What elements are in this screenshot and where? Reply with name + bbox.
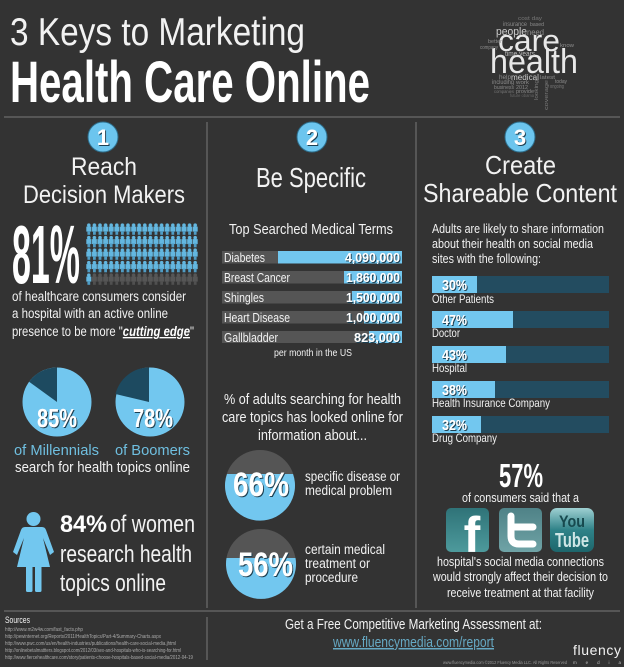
word cloud: coverage <box>544 80 550 110</box>
logo: fluency media: media <box>573 660 621 665</box>
word cloud: future obama <box>510 93 534 98</box>
bar chart: who adults share with: Health Insurance Company <box>432 396 550 410</box>
bar chart: who adults share with: Doctor <box>432 326 460 340</box>
text: cutting edge statement: of healthcare consumers consider <box>12 289 186 304</box>
word cloud: need <box>527 28 544 37</box>
icon: youtube: You <box>559 512 585 531</box>
word cloud: time years <box>505 51 535 58</box>
text: 84% of women: research health <box>60 541 192 568</box>
bar chart: who adults share with: Hospital <box>432 361 467 375</box>
logo: fluency media <box>573 642 621 665</box>
panel: create shareable content <box>423 122 618 600</box>
footer: sources: http://pewinternet.org/Reports/2011/HealthTopics/Part-4/Summary-Charts.aspx <box>5 634 161 640</box>
heading: reach decision makers: Decision Makers <box>23 181 185 209</box>
panel: reach decision makers <box>12 122 198 597</box>
bar chart: who adults share with <box>432 276 609 445</box>
icon: number 3 badge: 3 <box>514 125 526 150</box>
bar chart: top searched medical terms: Breast Cancer <box>224 271 290 285</box>
title: Health Care Online <box>10 50 370 115</box>
text: social media connections: receive treatment at that facility <box>447 585 594 600</box>
heading: reach decision makers: Reach <box>71 153 137 181</box>
word cloud: provide <box>516 89 534 95</box>
icon: number 1 badge <box>88 122 118 152</box>
pictogram: 81 of 100 people <box>86 223 198 286</box>
gauge: 66% specific disease <box>225 450 400 521</box>
icon: facebook <box>446 507 489 563</box>
heading: be specific: Be Specific <box>256 162 366 193</box>
footer: sources: http://onlinebetalmattters.blogspot.com/2012/03/sex-and-hospitals-who-is-searching-for.html <box>5 648 181 654</box>
pie captions <box>14 442 190 476</box>
bar chart: top searched medical terms: per month in the US <box>274 348 352 359</box>
text: adults searching intro: care topics has looked online for <box>222 410 403 426</box>
word cloud: company <box>480 45 498 51</box>
bar chart: who adults share with: 32% <box>442 417 467 434</box>
text: share intro <box>432 221 604 266</box>
icon: youtube <box>550 508 594 552</box>
word cloud: ongoing <box>550 84 564 90</box>
word cloud: based <box>530 22 544 28</box>
bar chart: top searched medical terms: Top Searched Medical Terms <box>229 221 393 238</box>
word cloud: care <box>498 23 560 58</box>
word cloud: looking <box>534 80 540 100</box>
call to action <box>285 617 542 651</box>
pie captions: search for health topics online <box>15 459 190 476</box>
icon: number 2 badge <box>297 122 327 152</box>
footer: sources: http://www.fiercehealthcare.com/story/patients-choose-hospitals-based-social-media/2012-04-19 <box>5 655 193 661</box>
footer: sources: http://www.m2w4w.com/fast_facts.php <box>5 627 83 633</box>
bar chart: top searched medical terms: 823,000 <box>354 331 400 345</box>
gauge: 56% medical treatment: certain medical <box>305 542 385 557</box>
text: consumers said: of consumers said that a <box>462 491 579 505</box>
logo: fluency media: fluency <box>573 642 621 658</box>
text: 84% of women <box>60 511 195 597</box>
text: cutting edge statement: a hospital with an active online <box>12 306 168 321</box>
call to action: Get a Free Competitive Marketing Assessment at: <box>285 617 542 633</box>
pie chart: boomers 78% <box>116 368 184 436</box>
word cloud: today <box>555 79 567 85</box>
bar chart: top searched medical terms: 1,000,000 <box>346 311 400 325</box>
text: 84% of women: 84% <box>60 511 107 538</box>
text: adults searching intro: % of adults searching for health <box>224 392 401 408</box>
panel: be specific <box>222 122 403 599</box>
bar chart: top searched medical terms: 1,860,000 <box>346 271 400 285</box>
text: share intro: about their health on social media <box>432 236 594 251</box>
footer: sources: http://www.pwc.com/us/en/health-industries/publications/health-care-social-media.jhtml <box>5 641 176 647</box>
panel: reach decision makers: 81% <box>12 208 80 301</box>
word cloud: know <box>560 43 574 49</box>
gauge: 66% specific disease: specific disease or <box>305 469 400 484</box>
word cloud: business <box>494 85 515 91</box>
word cloud: insurance <box>503 22 528 28</box>
heading: create shareable content: Create <box>485 150 556 180</box>
bar chart: who adults share with: Other Patients <box>432 292 494 306</box>
bar chart: who adults share with: 47% <box>442 312 467 329</box>
gauge: 66% specific disease: 66% <box>233 466 289 504</box>
bar chart: top searched medical terms: Diabetes <box>224 251 265 265</box>
bar chart: top searched medical terms: Heart Disease <box>224 311 290 325</box>
text: cutting edge statement <box>12 289 194 339</box>
word cloud: help <box>499 75 512 81</box>
icon: youtube: Tube <box>555 530 589 552</box>
word cloud: companies <box>494 89 515 94</box>
text: cutting edge statement: presence to be more "cutting edge" <box>12 324 194 339</box>
text: social media connections <box>432 554 608 600</box>
pie chart: boomers 78%: 78% <box>133 403 173 433</box>
bar chart: top searched medical terms: Gallbladder <box>224 331 278 345</box>
copyright line: www.fluencymedia.com ©2012 Fluency Media LLC. All Rights Reserved <box>443 659 567 665</box>
word cloud <box>480 16 578 110</box>
stat: 57%: 57% <box>499 457 543 494</box>
word cloud: cost day <box>518 16 543 22</box>
icon: number 2 badge: 2 <box>306 125 318 150</box>
gauge: 56% medical treatment <box>226 529 385 599</box>
bar chart: who adults share with: 43% <box>442 347 467 364</box>
pie chart: millennials 85%: 85% <box>37 403 77 433</box>
bar chart: top searched medical terms: 1,500,000 <box>346 291 400 305</box>
text: adults searching intro: information about... <box>258 428 367 444</box>
word cloud: 2012 <box>516 85 528 91</box>
icon: facebook: f <box>464 507 481 563</box>
footer: sources <box>5 615 193 661</box>
icon: number 3 badge <box>505 122 535 152</box>
bar chart: top searched medical terms <box>222 221 402 359</box>
text: share intro: sites with the following: <box>432 251 541 266</box>
word cloud: medical <box>511 73 539 82</box>
heading: create shareable content <box>423 150 618 208</box>
icon: number 1 badge: 1 <box>97 125 109 150</box>
icon: woman <box>13 512 54 592</box>
pie captions: of Millennials <box>14 442 99 459</box>
footer: sources: Sources <box>5 615 30 625</box>
word cloud: better <box>488 39 502 45</box>
title <box>10 11 370 115</box>
bar chart: top searched medical terms: Shingles <box>224 291 264 305</box>
word cloud: latest <box>540 75 556 81</box>
word cloud: people <box>496 26 527 38</box>
bar chart: top searched medical terms: 4,090,000 <box>345 251 400 265</box>
text: 84% of women: of women <box>110 511 195 538</box>
title: 3 Keys to Marketing <box>10 11 305 54</box>
bar chart: who adults share with: Drug Company <box>432 431 497 445</box>
heading: reach decision makers <box>23 153 185 209</box>
pie captions: of Boomers <box>115 442 190 459</box>
gauge: 56% medical treatment: procedure <box>305 570 358 585</box>
bar chart: who adults share with: 38% <box>442 382 467 399</box>
word cloud: including <box>492 80 514 86</box>
gauge: 56% medical treatment: 56% <box>238 546 293 584</box>
bar chart: who adults share with: 30% <box>442 277 467 294</box>
icon: twitter <box>499 508 542 552</box>
word cloud: work <box>516 80 530 86</box>
gauge: 56% medical treatment: treatment or <box>305 556 370 571</box>
pie chart: millennials 85% <box>22 368 92 436</box>
call to action: www.fluencymedia.com/report <box>332 634 495 651</box>
word cloud: health <box>490 43 578 81</box>
text: adults searching intro <box>222 392 403 444</box>
text: 84% of women: topics online <box>60 570 166 597</box>
gauge: 66% specific disease: medical problem <box>305 483 392 498</box>
